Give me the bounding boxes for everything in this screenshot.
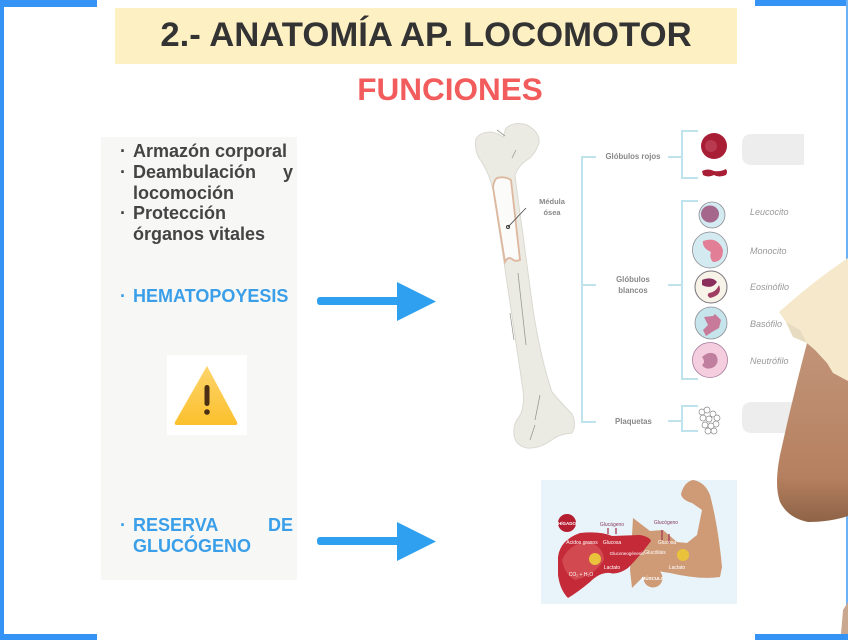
text: protección órganos vitales: Protección bbox=[133, 203, 226, 223]
text: deambulación y locomoción: Deambulación bbox=[133, 162, 256, 182]
labels: metabolism: Glucosa bbox=[603, 540, 621, 546]
text: · bbox=[120, 203, 126, 223]
labels: metabolism: Glucosa bbox=[658, 540, 676, 546]
icon: femur bbox=[475, 124, 574, 448]
icon: leucocito bbox=[699, 202, 725, 228]
title banner bbox=[115, 8, 737, 64]
labels: white cells: Basófilo bbox=[750, 319, 782, 329]
labels: blood groups: blancos bbox=[618, 286, 648, 295]
labels: metabolism: MÚSCULO bbox=[642, 575, 665, 581]
label: médula ósea: Médula bbox=[539, 197, 566, 206]
labels: metabolism: Ácidos grasos bbox=[566, 539, 598, 546]
labels: white cells: Eosinófilo bbox=[750, 282, 789, 292]
icon: platelets bbox=[699, 407, 720, 434]
text: · bbox=[120, 286, 126, 306]
labels: blood groups bbox=[605, 152, 661, 426]
arrow: hematopoyesis bbox=[317, 282, 436, 321]
grey label box: red cells bbox=[742, 134, 804, 165]
labels: metabolism: Lactato bbox=[669, 565, 685, 571]
text: protección órganos vitales: órganos vitales bbox=[133, 224, 265, 244]
labels: white cells: Neutrófilo bbox=[750, 356, 789, 366]
label: médula ósea: ósea bbox=[543, 208, 561, 217]
icon: liver bbox=[558, 514, 689, 598]
labels: metabolism bbox=[558, 519, 685, 581]
icon: muscled arm bbox=[630, 480, 722, 588]
text: deambulación y locomoción: locomoción bbox=[133, 183, 234, 203]
labels: metabolism: CO₂ + H₂O bbox=[569, 572, 593, 578]
text: reserva de glucógeno: GLUCÓGENO bbox=[133, 536, 251, 556]
text: deambulación y locomoción bbox=[120, 162, 293, 203]
labels: metabolism: HÍGADO bbox=[558, 519, 576, 526]
icon: monocito bbox=[692, 232, 728, 268]
text: reserva de glucógeno bbox=[120, 515, 293, 556]
labels: white cells: Leucocito bbox=[750, 207, 789, 217]
subtitle: funciones: FUNCIONES bbox=[357, 71, 543, 107]
text: deambulación y locomoción: y bbox=[283, 162, 293, 182]
labels: metabolism: Gluconeogénesis bbox=[610, 551, 645, 556]
text: · bbox=[120, 141, 126, 161]
labels: metabolism: Lactato bbox=[604, 565, 620, 571]
labels: blood groups: Plaquetas bbox=[615, 417, 652, 426]
labels: metabolism: Glucólisis bbox=[644, 550, 666, 556]
icon: basófilo bbox=[695, 307, 727, 339]
labels: blood groups: Glóbulos rojos bbox=[605, 152, 661, 161]
grey label box: platelets bbox=[742, 402, 804, 433]
icon: eosinófilo bbox=[695, 271, 727, 303]
text: hematopoyesis: HEMATOPOYESIS bbox=[133, 286, 288, 306]
text: reserva de glucógeno: DE bbox=[268, 515, 293, 535]
image: liver and muscle glycogen bbox=[541, 480, 737, 604]
icon: red blood cells bbox=[701, 133, 727, 176]
text: armazón corporal: Armazón corporal bbox=[133, 141, 287, 161]
connector brackets bbox=[582, 131, 698, 431]
labels: metabolism: Glucágeno bbox=[600, 522, 624, 528]
icon: neutrófilo bbox=[692, 342, 728, 378]
text: · bbox=[120, 515, 126, 535]
icon: warning bbox=[167, 355, 247, 435]
arrow: glucógeno bbox=[317, 522, 436, 561]
title banner: 2.- ANATOMÍA AP. LOCOMOTOR bbox=[160, 16, 692, 54]
text: protección órganos vitales bbox=[120, 203, 265, 244]
labels: metabolism: Glucógeno bbox=[654, 520, 678, 526]
labels: white cells bbox=[750, 207, 789, 366]
labels: blood groups: Glóbulos bbox=[616, 275, 651, 284]
text: · bbox=[120, 162, 126, 182]
labels: white cells: Monocito bbox=[750, 246, 787, 256]
text: reserva de glucógeno: RESERVA bbox=[133, 515, 218, 535]
panel: functions list bbox=[101, 137, 297, 580]
